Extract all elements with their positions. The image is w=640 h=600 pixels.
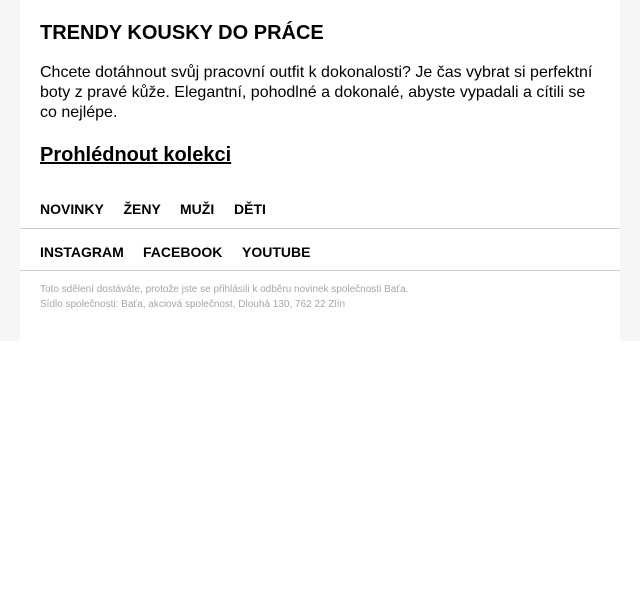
social links: INSTAGRAM	[40, 244, 124, 260]
category navigation: NOVINKY	[40, 201, 104, 217]
footer note: Sídlo společnosti: Baťa, akciová společnost, Dlouhá 130, 762 22 Zlín	[40, 299, 345, 310]
body text: boty z pravé kůže. Elegantní, pohodlné a dokonalé, abyste vypadali a cítili se	[40, 84, 585, 101]
category navigation: ŽENY	[124, 201, 161, 217]
category navigation: MUŽI	[180, 201, 214, 217]
body text	[40, 64, 592, 121]
social links: YOUTUBE	[242, 244, 310, 260]
email card	[20, 0, 620, 341]
category navigation	[40, 201, 266, 217]
social links	[40, 244, 310, 260]
body text: Chcete dotáhnout svůj pracovní outfit k dokonalosti? Je čas vybrat si perfektní	[40, 64, 592, 81]
page background	[0, 0, 640, 341]
footer note	[40, 284, 408, 310]
title: TRENDY KOUSKY DO PRÁCE	[40, 22, 324, 44]
call to action link: Prohlédnout kolekci	[40, 144, 231, 166]
body text: co nejlépe.	[40, 104, 117, 121]
footer note: Toto sdělení dostáváte, protože jste se přihlásili k odběru novinek společnosti Baťa.	[40, 284, 408, 295]
category navigation: DĚTI	[234, 201, 266, 217]
social links: FACEBOOK	[143, 244, 222, 260]
